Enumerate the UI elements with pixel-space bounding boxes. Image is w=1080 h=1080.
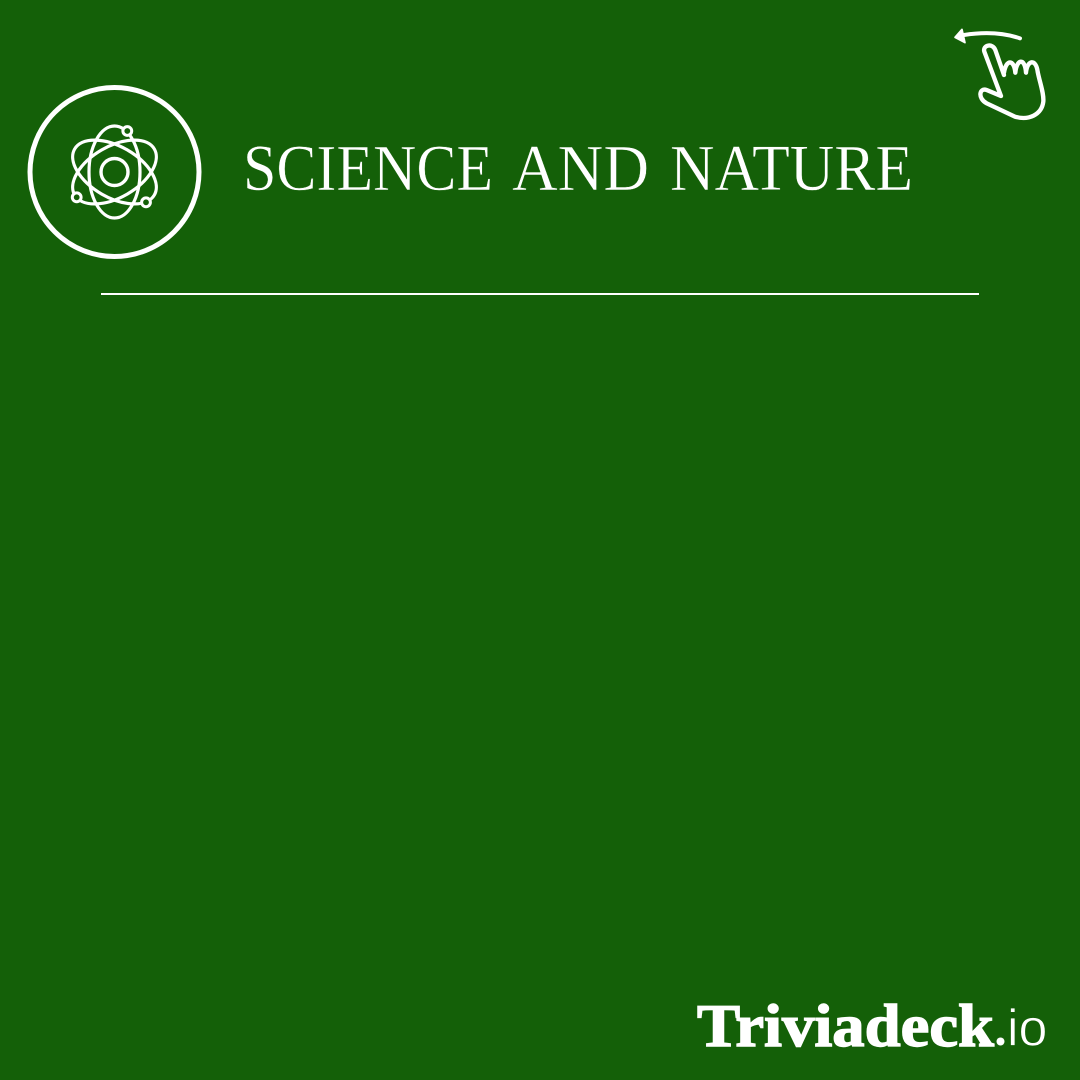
title [243, 132, 913, 205]
logo: Triviadeck.io: io [1007, 1000, 1047, 1058]
divider line [101, 293, 979, 295]
title: AND [512, 132, 649, 205]
logo: Triviadeck.io: Triviadeck [697, 993, 995, 1059]
icon: swipe left hand [955, 29, 1043, 118]
icon: atom in circle [30, 88, 199, 256]
title: SCIENCE [243, 132, 493, 205]
title: NATURE [670, 132, 913, 205]
